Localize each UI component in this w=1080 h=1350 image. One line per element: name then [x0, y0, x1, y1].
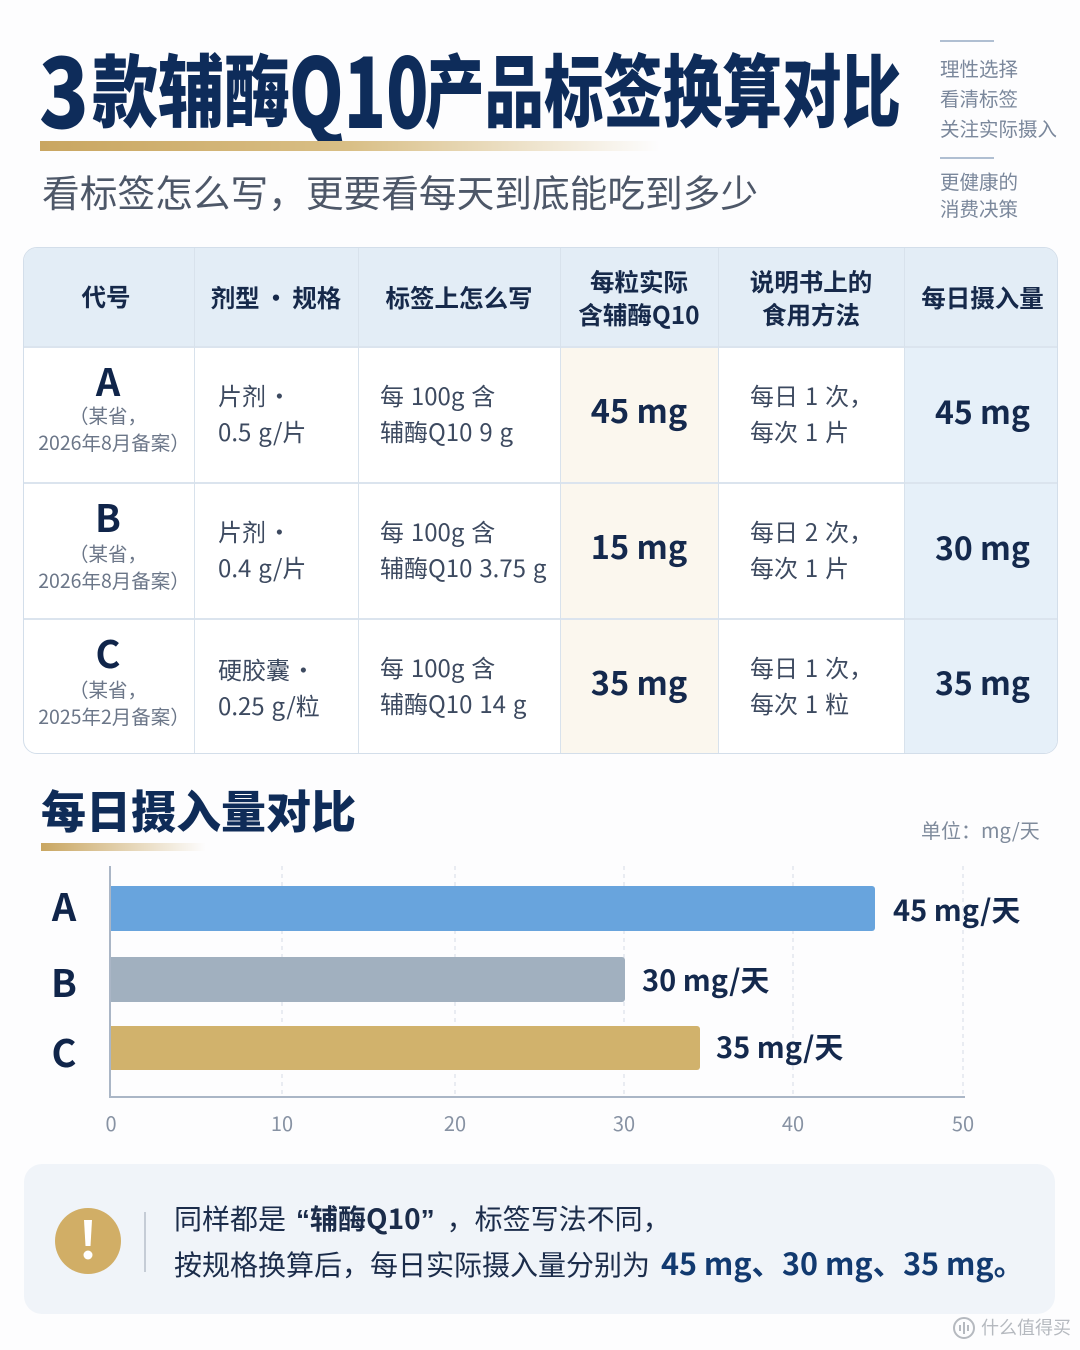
row C: 0.25 g/粒: [218, 687, 320, 722]
row B: 0.4 g/片: [218, 549, 306, 584]
table header: 每粒实际: [590, 264, 688, 299]
subtitle: 看标签怎么写，更要看每天到底能吃到多少: [42, 163, 758, 218]
callout: [24, 1164, 1055, 1314]
table header: 标签上怎么写: [386, 280, 532, 315]
axis ticks: 50: [952, 1108, 974, 1137]
row B: 每次 1 片: [750, 549, 849, 584]
row A: 45 mg: [591, 386, 687, 433]
row C: 35 mg: [935, 659, 1030, 705]
row C: 每日 1 次，: [750, 649, 873, 684]
row C: 每次 1 粒: [750, 685, 849, 720]
bar chart: [109, 866, 965, 1098]
comparison table: [23, 247, 1058, 754]
table header: 食用方法: [762, 297, 860, 332]
heading underline: [41, 843, 206, 851]
row C: 2025年2月备案）: [38, 701, 190, 730]
side note: 关注实际摄入: [940, 113, 1057, 142]
row B: [38, 488, 1030, 594]
bar A: [111, 886, 875, 931]
axis ticks: 10: [271, 1108, 293, 1137]
row C: C: [96, 624, 120, 679]
category labels: B: [51, 953, 77, 1008]
row B: 片剂 ·: [218, 513, 291, 548]
category labels: A: [52, 877, 76, 932]
table header: 代号: [82, 279, 130, 314]
unit label: 单位：mg/天: [921, 815, 1040, 844]
title: 3: [39, 17, 89, 156]
row B: 每 100g 含: [380, 513, 495, 548]
axis ticks: 20: [444, 1108, 466, 1137]
row A: （某省，: [69, 400, 147, 429]
side note: 消费决策: [940, 193, 1018, 222]
row C: （某省，: [69, 674, 147, 703]
row A: 45 mg: [935, 388, 1030, 434]
side note: 更健康的: [940, 166, 1018, 195]
row B: 30 mg: [935, 524, 1030, 570]
axis ticks: [105, 1108, 974, 1137]
row A: 每次 1 片: [750, 413, 849, 448]
row C: 35 mg: [591, 658, 687, 705]
table header: 每日摄入量: [921, 280, 1044, 315]
side note: [940, 40, 1057, 222]
bar C: [111, 1026, 700, 1070]
row B: 2026年8月备案）: [38, 565, 190, 594]
title: 款辅酶: [92, 29, 290, 145]
row A: 辅酶Q10 9 g: [380, 413, 513, 448]
axis ticks: 40: [782, 1108, 804, 1137]
category labels: [51, 877, 77, 1078]
row B: B: [95, 488, 121, 543]
table header: [82, 264, 1044, 332]
row A: 片剂 ·: [218, 377, 291, 412]
axis ticks: 30: [613, 1108, 635, 1137]
row A: A: [96, 352, 120, 407]
table header: 剂型 · 规格: [211, 280, 341, 315]
title underline: [40, 141, 660, 151]
watermark: 什么值得买: [981, 1314, 1071, 1340]
icon: watermark logo: [953, 1317, 975, 1339]
row B: 每日 2 次，: [750, 513, 873, 548]
chart heading: 每日摄入量对比: [41, 776, 356, 841]
bar value labels: 30 mg/天: [642, 958, 769, 1000]
title: Q10: [289, 17, 428, 157]
row C: [38, 624, 1030, 730]
table header: 含辅酶Q10: [578, 297, 700, 332]
callout text: 按规格换算后，每日实际摄入量分别为 45 mg、30 mg、35 mg。: [174, 1240, 1024, 1284]
row A: 0.5 g/片: [218, 413, 306, 448]
side note: 看清标签: [940, 83, 1018, 112]
row C: 硬胶囊 ·: [218, 651, 315, 686]
row A: [38, 352, 1030, 456]
bar value labels: 45 mg/天: [893, 888, 1020, 930]
row B: （某省，: [69, 538, 147, 567]
callout text: [174, 1198, 1024, 1284]
row A: 每日 1 次，: [750, 377, 873, 412]
grid lines: [109, 866, 965, 1098]
bar B: [111, 957, 625, 1002]
title: [39, 17, 901, 157]
axis ticks: 0: [105, 1108, 117, 1137]
title: 产品标签换算对比: [425, 30, 901, 144]
row C: 辅酶Q10 14 g: [380, 685, 526, 720]
side note: 理性选择: [940, 53, 1018, 82]
row A: 每 100g 含: [380, 377, 495, 412]
row A: 2026年8月备案）: [38, 427, 190, 456]
row B: 15 mg: [591, 522, 687, 569]
table header: 说明书上的: [750, 264, 872, 299]
icon: warning: [55, 1208, 121, 1274]
row B: 辅酶Q10 3.75 g: [380, 549, 546, 584]
callout text: 同样都是 “辅酶Q10” ，标签写法不同，: [174, 1198, 671, 1238]
bar value labels: 35 mg/天: [716, 1025, 843, 1067]
bar value labels: [642, 888, 1020, 1067]
row C: 每 100g 含: [380, 649, 495, 684]
category labels: C: [52, 1023, 76, 1078]
